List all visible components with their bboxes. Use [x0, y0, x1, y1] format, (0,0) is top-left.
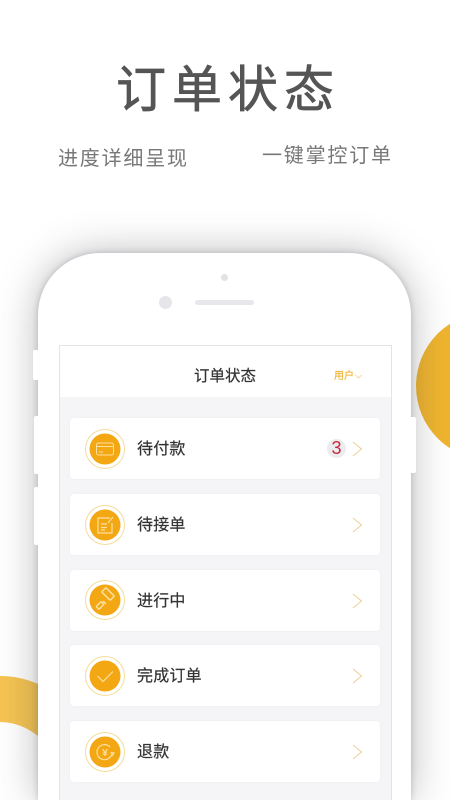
front camera	[159, 296, 172, 309]
icon: check	[85, 656, 125, 696]
decorative circle right	[416, 312, 450, 460]
row: in progress	[70, 570, 380, 631]
decorative arc bottom left	[0, 676, 38, 736]
row: completed	[70, 645, 380, 706]
row: awaiting acceptance: 待接单	[137, 517, 186, 534]
title: 订单状态	[116, 62, 340, 118]
subtitle right: 一键掌控订单	[262, 145, 393, 167]
row: in progress: 进行中	[137, 593, 186, 610]
user dropdown: 用户	[334, 371, 354, 382]
arrow	[352, 518, 362, 532]
camera dot	[221, 274, 228, 281]
subtitle left: 进度详细呈现	[58, 148, 189, 170]
row: refund	[70, 721, 380, 782]
phone side buttons	[33, 350, 416, 545]
phone screen	[59, 345, 392, 800]
badge: 3	[331, 438, 342, 458]
speaker	[195, 300, 254, 305]
row: pending payment	[70, 418, 380, 479]
icon: note	[85, 505, 125, 545]
row: refund: 退款	[137, 744, 169, 761]
row: completed: 完成订单	[137, 668, 202, 685]
arrow	[352, 744, 362, 760]
user dropdown	[334, 370, 362, 382]
header title: 订单状态	[194, 368, 256, 385]
row: pending payment: 待付款	[137, 441, 186, 458]
row: awaiting acceptance	[70, 494, 380, 555]
arrow	[352, 594, 362, 608]
phone body	[38, 253, 411, 800]
icon: roller	[85, 580, 125, 620]
arrow	[352, 442, 362, 456]
arrow	[352, 668, 362, 684]
icon: refund: ¥	[102, 748, 108, 759]
icon: card	[85, 429, 125, 469]
icon: refund	[85, 732, 125, 772]
badge	[327, 439, 346, 458]
screen header	[60, 346, 391, 397]
